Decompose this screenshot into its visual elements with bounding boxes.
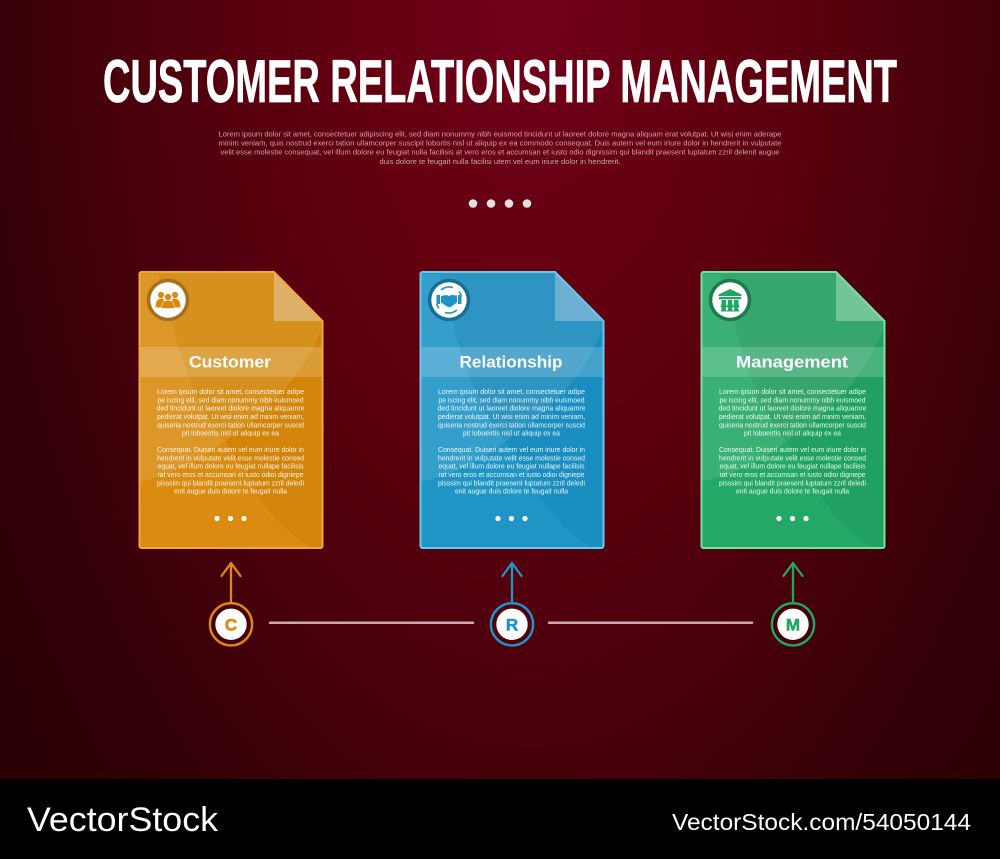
body text: relationship: equat, vel illum dolore eu feugiat nullape facilisis bbox=[438, 464, 585, 471]
intro text block: velit esse molestie consequat, vel illum dolore eu feugiat nulla facilisis at vero eros et accumsan et iusto odio dignissim qui blandit praesent luptatum zzril delenit augue bbox=[220, 148, 780, 156]
panel: management bbox=[701, 272, 885, 548]
arrow: relationship bbox=[502, 563, 522, 603]
body text: customer: hendrerit in vulputate velit esse molestie consed bbox=[157, 455, 304, 462]
letter node: C bbox=[210, 603, 252, 645]
body text: relationship: hendrerit in vulputate velit esse molestie consed bbox=[438, 455, 585, 462]
body text: management: Consequat. Duiseri autem vel eum iriure dolor in bbox=[719, 447, 866, 454]
body text: management: quiseria nostrud exerci tation ullamcorper suscid bbox=[719, 422, 866, 429]
body text: relationship bbox=[438, 389, 586, 496]
body text: management: pit loboeirtis nisl ut aliquip ex ea bbox=[744, 431, 841, 438]
folded corner bbox=[274, 272, 323, 321]
body text: customer: quiseria nostrud exerci tation ullamcorper suscid bbox=[157, 422, 304, 429]
body text: management: equat, vel illum dolore eu feugiat nullape facilisis bbox=[720, 464, 866, 471]
icon: handshake bbox=[428, 279, 470, 321]
card dots bbox=[495, 516, 528, 521]
body text: relationship: Lorem ipsum dolor sit amet, consectetuer adipe bbox=[438, 389, 585, 396]
body text: relationship: pedierat volutpat. Ut wisi enim ad minim veniam, bbox=[438, 414, 585, 421]
body text: relationship: pe iscing elit, sed diam nonummy nibh euismoed bbox=[438, 397, 585, 404]
title band bbox=[139, 347, 323, 377]
body text: relationship: ded tincidunt ut laoreet diolore magna aliquamre bbox=[438, 406, 586, 413]
arrow: customer bbox=[222, 563, 240, 603]
heading: management: Management bbox=[736, 352, 848, 372]
body text: management bbox=[718, 389, 867, 496]
body text: management: Lorem ipsum dolor sit amet, consectetuer adipe bbox=[719, 389, 866, 396]
heading: relationship: Relationship bbox=[460, 352, 562, 372]
body text: management: enit augue duis dolore te feugait nulla bbox=[736, 489, 849, 496]
footer bar bbox=[0, 779, 1000, 859]
outline bbox=[420, 272, 604, 548]
body text: management: pedierat volutpat. Ut wisi enim ad minim veniam, bbox=[719, 414, 866, 421]
body text: customer: rat vero eros et accumsan et iusto odioi digniepe bbox=[158, 472, 304, 479]
body text: customer: pit loboeirtis nisl ut aliquip ex ea bbox=[182, 431, 279, 438]
body text: management: ded tincidunt ut laoreet diolore magna aliquamre bbox=[718, 406, 867, 413]
arrow: management bbox=[784, 563, 802, 603]
panel: relationship bbox=[420, 272, 604, 548]
card dots bbox=[214, 516, 247, 521]
body text: customer: enit augue duis dolore te feugait nulla bbox=[174, 489, 287, 496]
letter node: M bbox=[772, 603, 814, 645]
icon: people bbox=[147, 279, 189, 321]
outline bbox=[140, 272, 322, 548]
body text: management: rat vero eros et accumsan et iusto odioi digniepe bbox=[720, 472, 866, 479]
body text: customer: pisssim qui blandit praesent luptatum zzril deledi bbox=[157, 480, 304, 487]
body text: customer: Lorem ipsum dolor sit amet, consectetuer adipe bbox=[157, 389, 304, 396]
pagination dots bbox=[469, 199, 531, 208]
body text: management: hendrerit in vulputate velit esse molestie consed bbox=[719, 455, 866, 462]
body text: customer: ded tincidunt ut laoreet diolore magna aliquamre bbox=[156, 406, 305, 413]
body text: relationship: quiseria nostrud exerci tation ullamcorper suscid bbox=[438, 422, 585, 429]
intro text block: duis dolore te feugait nulla facilisi utem vel eum iriure dolor in hendrerit. bbox=[380, 157, 620, 166]
intro text block bbox=[218, 130, 782, 166]
connector line: R to M bbox=[549, 621, 752, 624]
body text: customer: pe iscing elit, sed diam nonummy nibh euismoed bbox=[158, 397, 304, 404]
folded corner bbox=[836, 272, 885, 321]
letter node: M: M bbox=[786, 615, 800, 634]
icon: institution bbox=[709, 279, 751, 321]
body text: relationship: Consequat. Duiseri autem vel eum iriure dolor in bbox=[438, 447, 585, 454]
heading: customer: Customer bbox=[189, 352, 271, 372]
body text: relationship: pit loboeirtis nisl ut aliquip ex ea bbox=[463, 431, 560, 438]
card dots bbox=[776, 516, 809, 521]
connector line: C to R bbox=[270, 621, 473, 624]
letter node: R bbox=[491, 603, 533, 645]
intro text block: minim veniam, quis nostrud exerci tation ullamcorper suscipit lobortis nisl ut aliquip ex ea commodo consequat. Duis autem vel eum iriure dolor in hendrerit in vulputate bbox=[218, 138, 782, 148]
body text: management: pe iscing elit, sed diam nonummy nibh euismoed bbox=[720, 397, 866, 404]
body text: customer bbox=[156, 389, 305, 496]
body text: relationship: pisssim qui blandit praesent luptatum zzril deledi bbox=[438, 480, 585, 487]
title band bbox=[420, 347, 604, 377]
footer url: VectorStock.com/54050144 bbox=[672, 809, 971, 835]
body text: customer: equat, vel illum dolore eu feugiat nullape facilisis bbox=[158, 464, 304, 471]
outline bbox=[702, 272, 884, 548]
letter node: C: C bbox=[225, 615, 237, 634]
letter node: R: R bbox=[506, 615, 518, 634]
panel: customer bbox=[139, 272, 323, 548]
intro text block: Lorem ipsum dolor sit amet, consectetuer adipiscing elit, sed diam nonummy nibh euismod tincidunt ut laoreet dolore magna aliquam erat volutpat. Ut wisi enim aderape bbox=[218, 130, 782, 138]
body text: relationship: enit augue duis dolore te feugait nulla bbox=[455, 489, 568, 496]
body text: customer: pedierat volutpat. Ut wisi enim ad minim veniam, bbox=[157, 414, 304, 421]
folded corner bbox=[555, 272, 604, 321]
body text: relationship: rat vero eros et accumsan et iusto odioi digniepe bbox=[438, 472, 585, 479]
body text: management: pisssim qui blandit praesent luptatum zzril deledi bbox=[719, 480, 866, 487]
title band bbox=[701, 347, 885, 377]
body text: customer: Consequat. Duiseri autem vel eum iriure dolor in bbox=[157, 447, 304, 454]
footer logo: VectorStock bbox=[27, 801, 219, 839]
